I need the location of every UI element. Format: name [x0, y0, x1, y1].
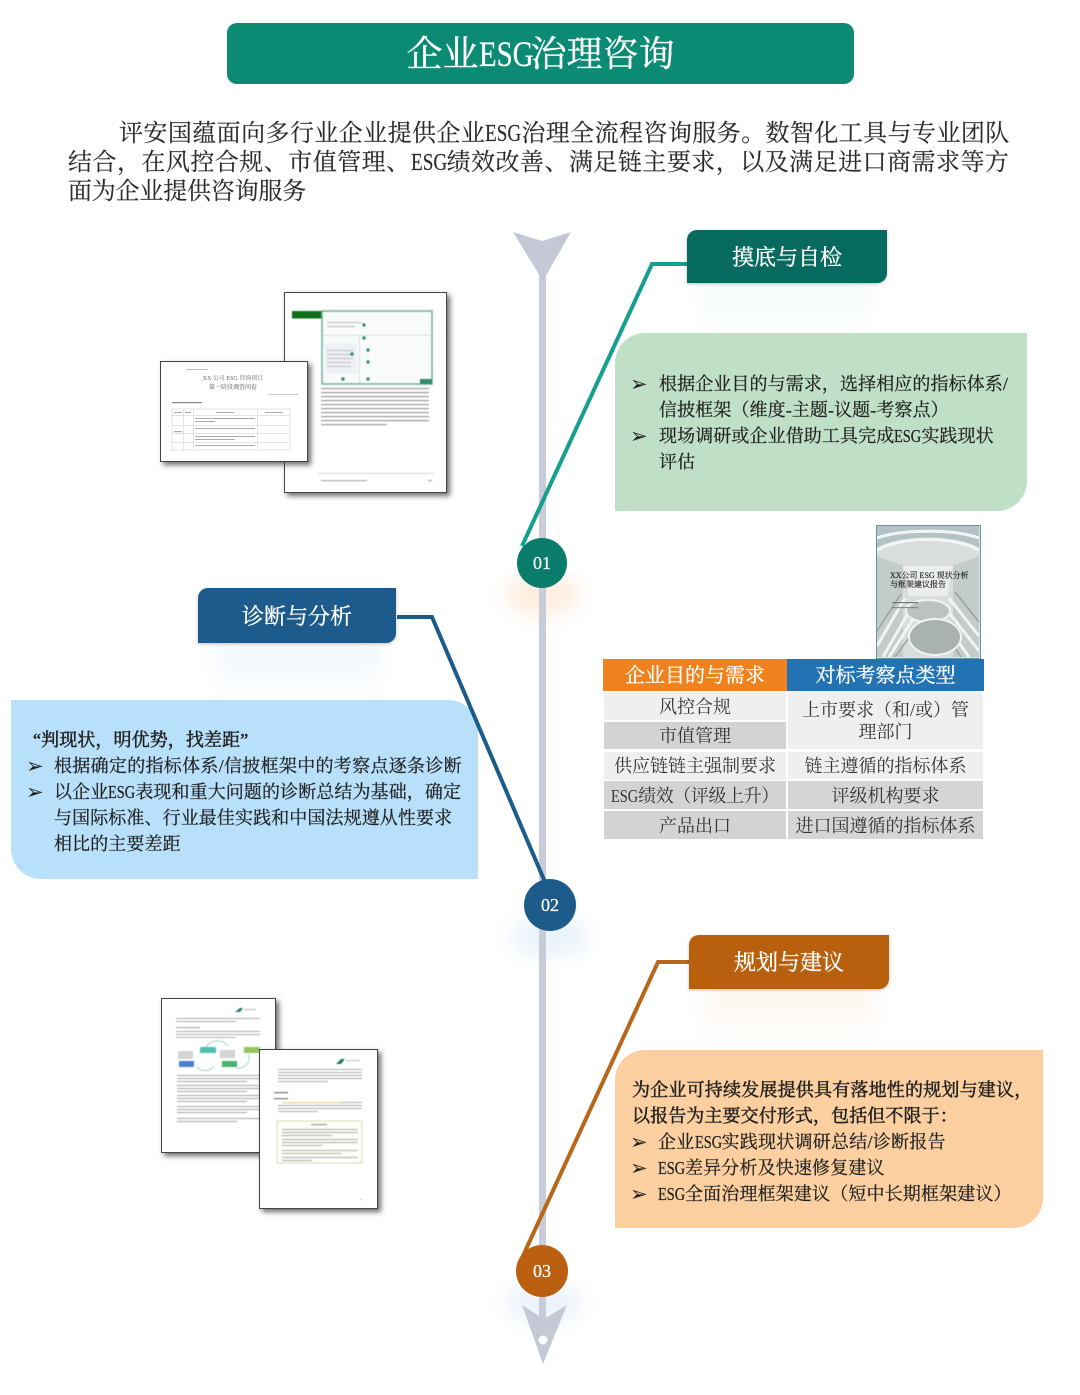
intro paragraph: 结合，在风控合规、市值管理、 绩效改善、满足链主要求，以及满足进口商需求等方	[68, 150, 1009, 176]
badge: step 1 title	[687, 230, 887, 283]
node 01	[517, 538, 567, 588]
right column rows: 评级机构要求	[832, 786, 940, 806]
bullet list step 3: ➢	[630, 1182, 648, 1206]
bullet list step 2: ➢	[26, 780, 44, 804]
bullet list step 2: ➢	[26, 754, 44, 778]
node 03: 03	[533, 1261, 551, 1281]
document: report page with callout box	[259, 1049, 378, 1209]
badge: step 1 title: 摸底与自检	[732, 245, 842, 270]
bullet list step 1: 信披框架（维度-主题-议题-考察点）	[659, 400, 949, 420]
document: questionnaire page: 第一阶段调查问卷	[209, 383, 257, 391]
right column rows	[788, 692, 983, 839]
bullet list step 1: ESG	[894, 426, 922, 446]
left column rows: 供应链链主强制要求	[614, 756, 776, 776]
document thumbnails: step 1	[159, 291, 454, 500]
report cover image: 与框架建议报告	[890, 579, 946, 589]
bullet list step 3: ESG	[694, 1132, 722, 1152]
bullet list step 2: 根据确定的指标体系/信披框架中的考察点逐条诊断	[54, 756, 462, 776]
node 01: 01	[533, 553, 551, 573]
intro paragraph	[68, 120, 1010, 205]
left column rows: 风控合规	[659, 697, 731, 717]
bullet list step 1: 现场调研或企业借助工具完成 实践现状	[659, 426, 994, 446]
table header left: 企业目的与需求	[625, 665, 765, 687]
document: questionnaire page: XX 公司 ESG 咨询项目	[203, 374, 263, 382]
intro paragraph: 评安国蕴面向多行业企业提供企业 治理全流程咨询服务。数智化工具与专业团队	[119, 121, 1010, 147]
bullet list step 2	[26, 730, 462, 854]
right column rows: 链主遵循的指标体系	[804, 756, 966, 776]
bullet list step 1: ➢	[630, 372, 648, 396]
table header right	[787, 659, 984, 691]
document: back page with screenshot	[284, 292, 447, 493]
bullet list step 2: 以企业 表现和重大问题的诊断总结为基础，确定	[54, 782, 461, 802]
bullet list step 1: ➢	[630, 424, 648, 448]
node 03	[516, 1245, 568, 1297]
badge: step 2 title	[198, 588, 396, 643]
left column rows: 市值管理	[659, 726, 731, 746]
left column rows	[604, 692, 786, 839]
right column rows: 理部门	[858, 722, 912, 742]
bullet list step 3	[630, 1080, 1032, 1206]
document: report page with flow diagram	[161, 998, 276, 1153]
node 02	[524, 879, 576, 931]
panel: step 3 text	[615, 1050, 1043, 1228]
bullet list step 3: 企业 实践现状调研总结/诊断报告	[658, 1132, 946, 1152]
document thumbnails: step 3	[160, 997, 385, 1216]
bullet list step 3: ESG	[658, 1158, 685, 1178]
bullet list step 3: ➢	[630, 1156, 648, 1180]
panel: step 1 text	[615, 333, 1027, 511]
bullet list step 2: “判现状，明优势，找差距”	[33, 730, 248, 750]
bullet list step 1: 评估	[659, 452, 695, 472]
right column rows: 上市要求（和/或）管	[802, 700, 969, 720]
intro paragraph: ESG	[485, 121, 522, 147]
bullet list step 3: 全面治理框架建议（短中长期框架建议）	[685, 1184, 1012, 1204]
panel: step 2 text	[11, 700, 478, 879]
bullet list step 3: 以报告为主要交付形式，包括但不限于：	[632, 1106, 958, 1126]
table header left	[603, 659, 787, 691]
bullet list step 1: 根据企业目的与需求，选择相应的指标体系/	[659, 374, 1008, 394]
intro paragraph: ESG	[411, 150, 447, 176]
left column rows: ESG	[611, 786, 638, 806]
node 02: 02	[541, 895, 559, 915]
bullet list step 3: 为企业可持续发展提供具有落地性的规划与建议，	[632, 1080, 1032, 1100]
document: questionnaire page	[160, 361, 308, 462]
bullet list step 3: 差异分析及快速修复建议	[685, 1158, 885, 1178]
badge: step 3 title	[689, 935, 889, 989]
title banner	[227, 23, 854, 84]
left column rows: 产品出口	[659, 816, 731, 836]
bullet list step 3: ➢	[630, 1130, 648, 1154]
badge: step 3 title: 规划与建议	[734, 950, 844, 975]
title banner: 企业 治理咨询	[406, 34, 675, 74]
table: needs vs benchmark types	[603, 659, 984, 839]
badge: step 2 title: 诊断与分析	[242, 604, 352, 629]
table header right: 对标考察点类型	[816, 665, 956, 687]
report cover image	[876, 525, 981, 659]
bullet list step 2: ESG	[108, 782, 136, 802]
bullet list step 2: 与国际标准、行业最佳实践和中国法规遵从性要求	[54, 808, 452, 828]
report cover image: XX公司 ESG 现状分析	[890, 570, 969, 580]
title banner: ESG	[478, 34, 533, 74]
bullet list step 2: 相比的主要差距	[54, 834, 181, 854]
bullet list step 3: ESG	[658, 1184, 685, 1204]
bullet list step 1	[630, 372, 1008, 472]
right column rows: 进口国遵循的指标体系	[796, 816, 976, 836]
left column rows: 绩效（评级上升）	[638, 786, 779, 806]
intro paragraph: 面为企业提供咨询服务	[68, 179, 306, 205]
